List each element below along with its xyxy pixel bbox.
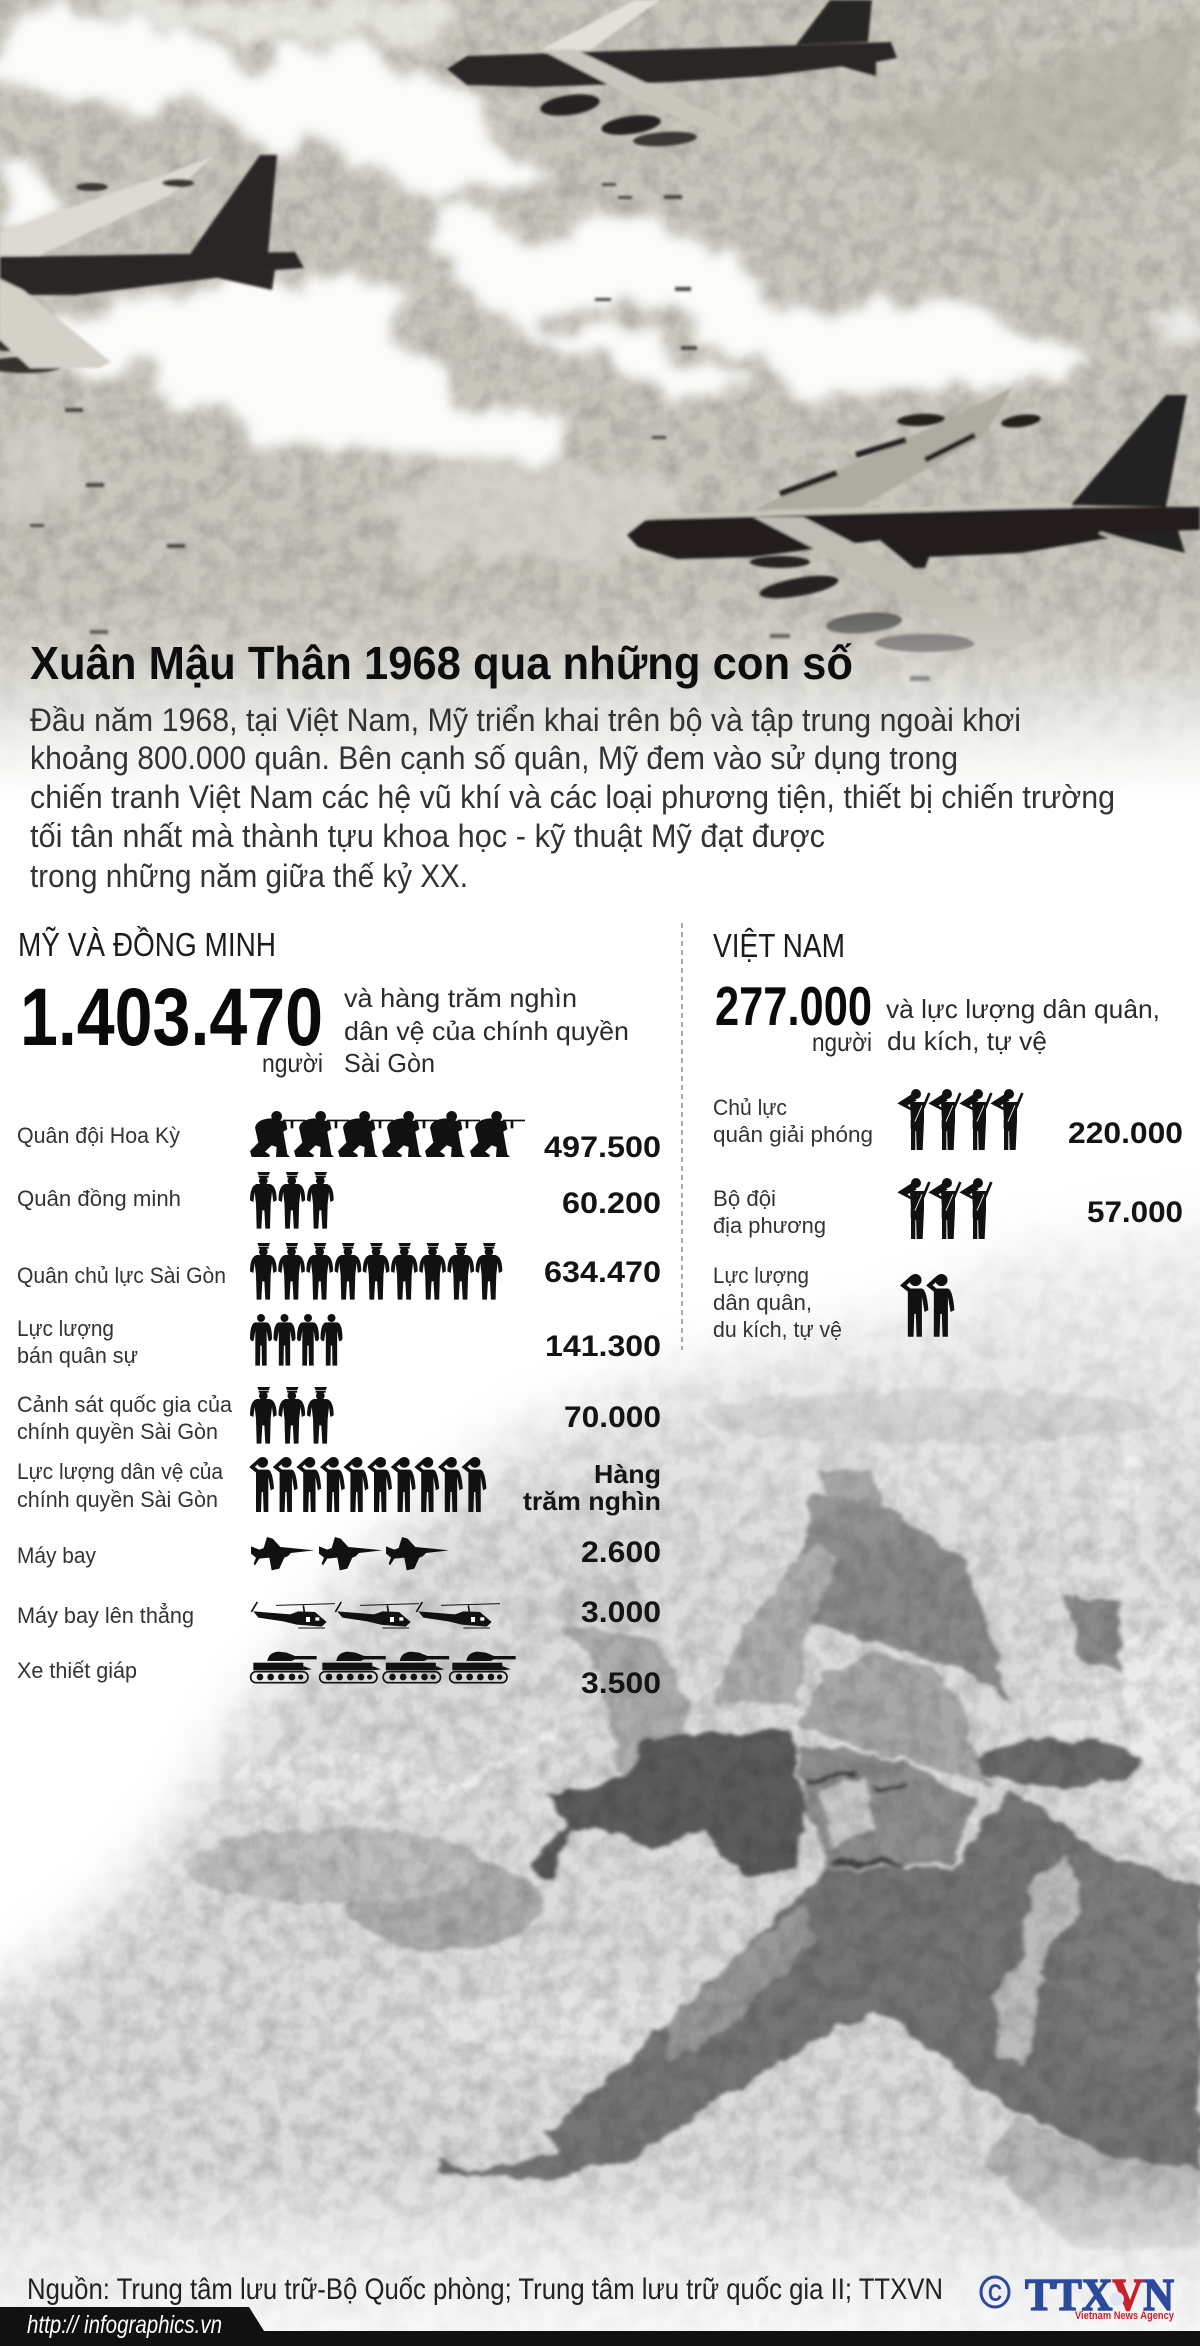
row: paramilitary: Lực lượng [17,1316,114,1341]
heading: Vietnam: VIỆT NAM [713,927,845,964]
intro text: tối tân nhất mà thành tựu khoa học - kỹ thuật Mỹ đạt được [30,818,825,854]
intro text: Đầu năm 1968, tại Việt Nam, Mỹ triển khai trên bộ và tập trung ngoài khơi [30,702,1021,738]
row: paramilitary [17,1314,661,1368]
row: national police: Cảnh sát quốc gia của [17,1392,233,1417]
row: armored vehicles: Xe thiết giáp [17,1658,137,1683]
row: helicopters: 3.000 [581,1596,661,1629]
row: civil guard: chính quyền Sài Gòn [17,1487,218,1512]
row: armored vehicles: 3.500 [581,1667,661,1700]
row: Saigon main force: 634.470 [544,1256,661,1289]
total description: du kích, tự vệ [887,1026,1047,1056]
row: civil guard: trăm nghìn [523,1486,661,1516]
row: civil guard [17,1457,661,1516]
row: liberation main force: 220.000 [1068,1117,1183,1150]
row: helicopters [17,1596,661,1629]
row: US forces: Quân đội Hoa Kỳ [17,1123,180,1148]
footer bar [0,2307,1200,2346]
row: aircraft: 2.600 [581,1536,661,1569]
title: Xuân Mậu Thân 1968 qua những con số [30,637,853,689]
intro text: khoảng 800.000 quân. Bên cạnh số quân, Mỹ đem vào sử dụng trong [30,740,958,776]
row: local troops: Bộ đội [713,1186,776,1211]
row: armored vehicles [17,1652,661,1700]
row: paramilitary: bán quân sự [17,1343,138,1368]
row: US forces: 497.500 [544,1131,661,1164]
row: national police: chính quyền Sài Gòn [17,1419,218,1444]
row: national police [17,1387,661,1444]
row: US forces [17,1111,661,1164]
row: aircraft: Máy bay [17,1543,96,1568]
row: militia: dân quân, [713,1290,812,1315]
row: allied forces: 60.200 [562,1187,661,1220]
source line: Nguồn: Trung tâm lưu trữ-Bộ Quốc phòng; Trung tâm lưu trữ quốc gia II; TTXVN [27,2273,943,2306]
copyright mark: C [988,2280,1002,2307]
panel: US and allies [17,926,661,1700]
photo: B-52 bombers [0,0,1200,801]
row: allied forces [17,1172,661,1229]
total: 277.000: 277.000 [715,975,872,1037]
row: liberation main force: quân giải phóng [713,1122,873,1147]
intro text: trong những năm giữa thế kỷ XX. [30,858,468,894]
total description [344,983,629,1078]
plane: lower right bomber [627,387,1200,652]
plane: upper bomber [447,0,897,148]
row: local troops [713,1178,1183,1239]
unit: people: người [262,1048,323,1078]
footer bar: http:// infographics.vn [27,2311,222,2339]
row: paramilitary: 141.300 [545,1330,661,1363]
row: national police: 70.000 [564,1401,661,1434]
total description: và lực lượng dân quân, [886,994,1160,1024]
logo: TTXVN: TTXVN [1025,2269,1174,2320]
row: liberation main force [713,1089,1183,1150]
logo: TTXVN: Vietnam News Agency [1075,2310,1175,2322]
row: allied forces: Quân đồng minh [17,1186,181,1211]
falling bombs [30,183,930,681]
total description [886,994,1160,1056]
panel: Vietnam [713,927,1183,1342]
plane: left bomber [0,155,304,373]
row: militia [713,1263,954,1342]
row: local troops: địa phương [713,1213,826,1238]
row: civil guard: Lực lượng dân vệ của [17,1459,224,1484]
photo: soldiers advancing [0,1000,1200,2346]
row: militia: Lực lượng [713,1263,809,1288]
total: 1.403.470: 1.403.470 [20,972,323,1063]
total description: và hàng trăm nghìn [344,983,577,1013]
intro text: chiến tranh Việt Nam các hệ vũ khí và các loại phương tiện, thiết bị chiến trường [30,779,1115,815]
row: militia: du kích, tự vệ [713,1317,842,1342]
row: Saigon main force: Quân chủ lực Sài Gòn [17,1263,226,1288]
row: liberation main force: Chủ lực [713,1095,787,1120]
row: local troops: 57.000 [1087,1196,1183,1229]
row: Saigon main force [17,1243,661,1300]
total description: dân vệ của chính quyền [344,1016,629,1046]
row: helicopters: Máy bay lên thẳng [17,1603,194,1628]
row: aircraft [17,1536,661,1570]
unit: people: người [812,1027,872,1057]
total description: Sài Gòn [344,1048,435,1078]
intro text [30,702,1115,894]
copyright mark [981,2277,1009,2307]
heading: US and allies: MỸ VÀ ĐỒNG MINH [18,926,276,963]
row: civil guard: Hàng [594,1459,661,1489]
